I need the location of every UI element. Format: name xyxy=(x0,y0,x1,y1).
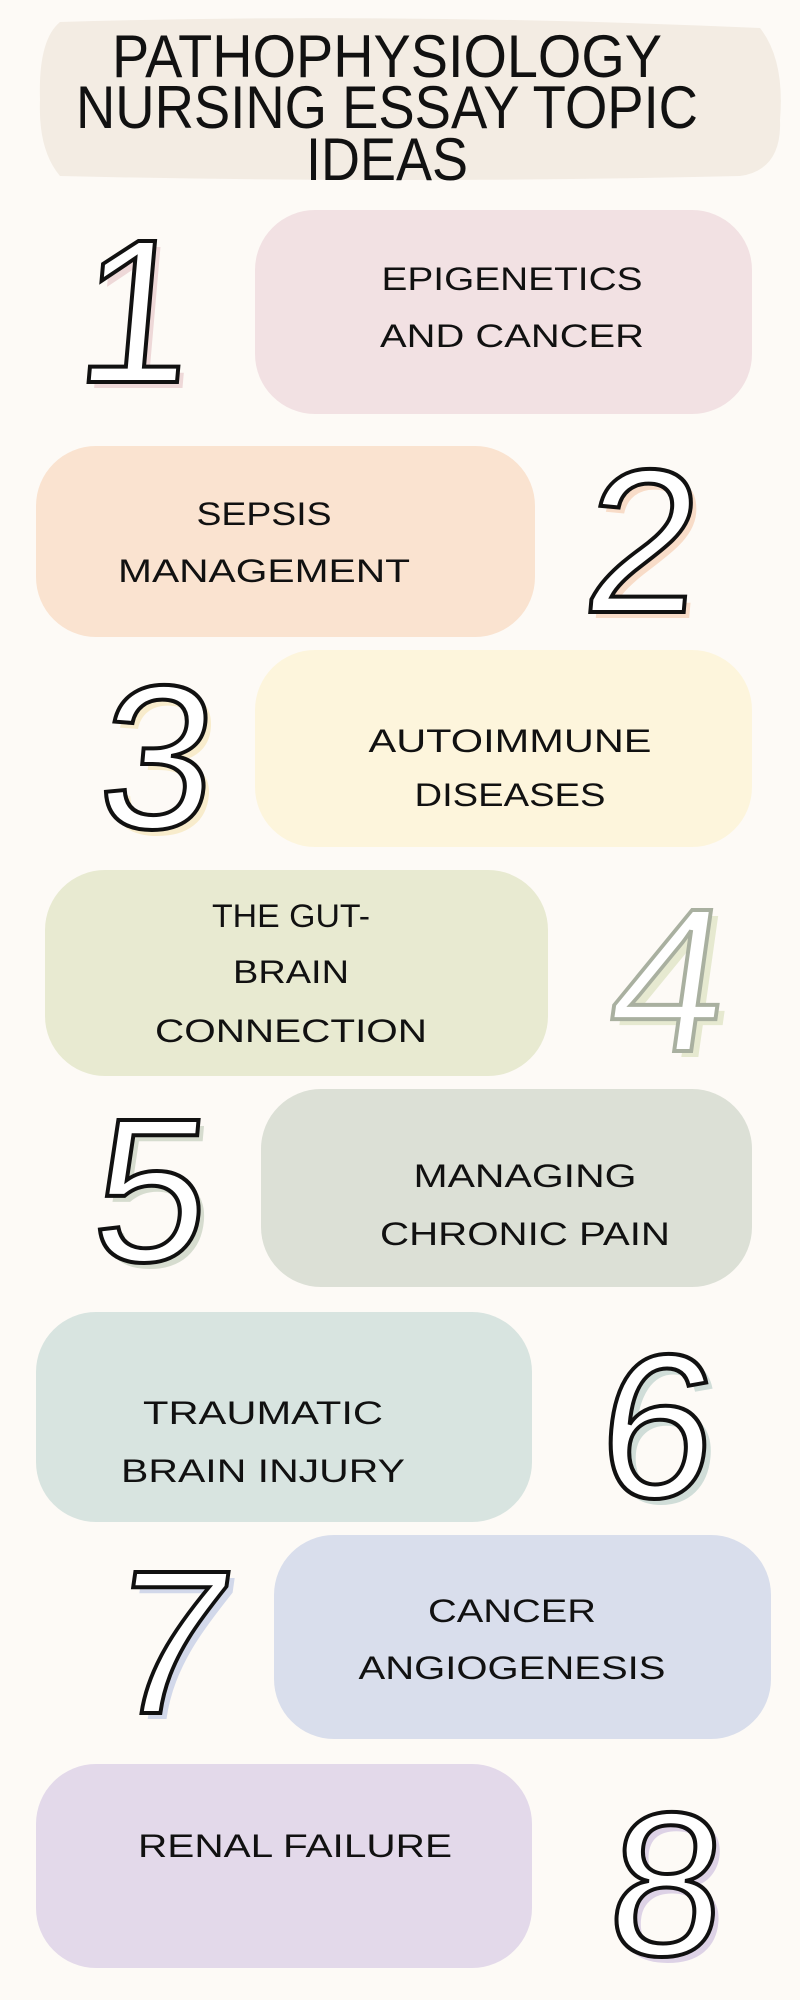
icon: number 1: 1 xyxy=(75,202,209,432)
panel: 2 sepsis: SEPSIS xyxy=(196,496,332,532)
panel: 6 traumatic brain injury xyxy=(36,1312,532,1522)
panel: 3 autoimmune xyxy=(255,650,752,847)
panel: 4 gut-brain: CONNECTION xyxy=(155,1013,427,1049)
panel: 2 sepsis: MANAGEMENT xyxy=(118,553,410,589)
panel: 7 angiogenesis xyxy=(274,1535,771,1739)
icon: number 6: 6 xyxy=(598,1317,732,1547)
panel: 4 gut-brain xyxy=(45,870,548,1076)
panel: 2 sepsis xyxy=(36,446,535,637)
panel: 5 chronic pain: CHRONIC PAIN xyxy=(380,1216,670,1252)
panel: 6 traumatic brain injury: BRAIN INJURY xyxy=(121,1453,405,1489)
icon: number 6: 6 xyxy=(591,1311,725,1541)
panel: 5 chronic pain xyxy=(261,1089,752,1287)
panel: 4 gut-brain: THE GUT- xyxy=(212,898,370,934)
panel: 6 traumatic brain injury: TRAUMATIC xyxy=(143,1395,383,1431)
title xyxy=(40,18,781,193)
panel: 1 epigenetics xyxy=(255,210,752,414)
panel: 3 autoimmune: AUTOIMMUNE xyxy=(368,723,652,759)
icon: number 5: 5 xyxy=(85,1075,219,1305)
icon: number 3: 3 xyxy=(91,642,225,872)
icon: number 2: 2 xyxy=(582,432,716,662)
icon: number 7: 7 xyxy=(99,1528,245,1757)
icon: number 3: 3 xyxy=(97,648,231,878)
panel: 8 renal failure: RENAL FAILURE xyxy=(138,1828,452,1864)
icon: number 5: 5 xyxy=(91,1081,225,1311)
panel: 8 renal failure xyxy=(36,1764,532,1968)
title: PATHOPHYSIOLOGY xyxy=(112,23,662,90)
title: NURSING ESSAY TOPIC xyxy=(76,74,698,141)
icon: number 4: 4 xyxy=(597,866,743,1095)
icon: number 2: 2 xyxy=(576,426,710,656)
icon: number 1: 1 xyxy=(69,196,203,426)
panel: 4 gut-brain: BRAIN xyxy=(233,954,349,990)
icon: number 8: 8 xyxy=(607,1776,738,2000)
title: IDEAS xyxy=(306,126,468,193)
panel: 1 epigenetics: AND CANCER xyxy=(380,318,644,354)
panel: 3 autoimmune: DISEASES xyxy=(414,777,606,813)
panel: 1 epigenetics: EPIGENETICS xyxy=(382,261,642,297)
icon: number 7: 7 xyxy=(105,1534,251,1763)
panel: 7 angiogenesis: CANCER xyxy=(428,1593,596,1629)
panel: 5 chronic pain: MANAGING xyxy=(414,1158,636,1194)
icon: number 8: 8 xyxy=(602,1770,732,1999)
panel: 7 angiogenesis: ANGIOGENESIS xyxy=(358,1650,666,1686)
icon: number 4: 4 xyxy=(604,872,750,1101)
